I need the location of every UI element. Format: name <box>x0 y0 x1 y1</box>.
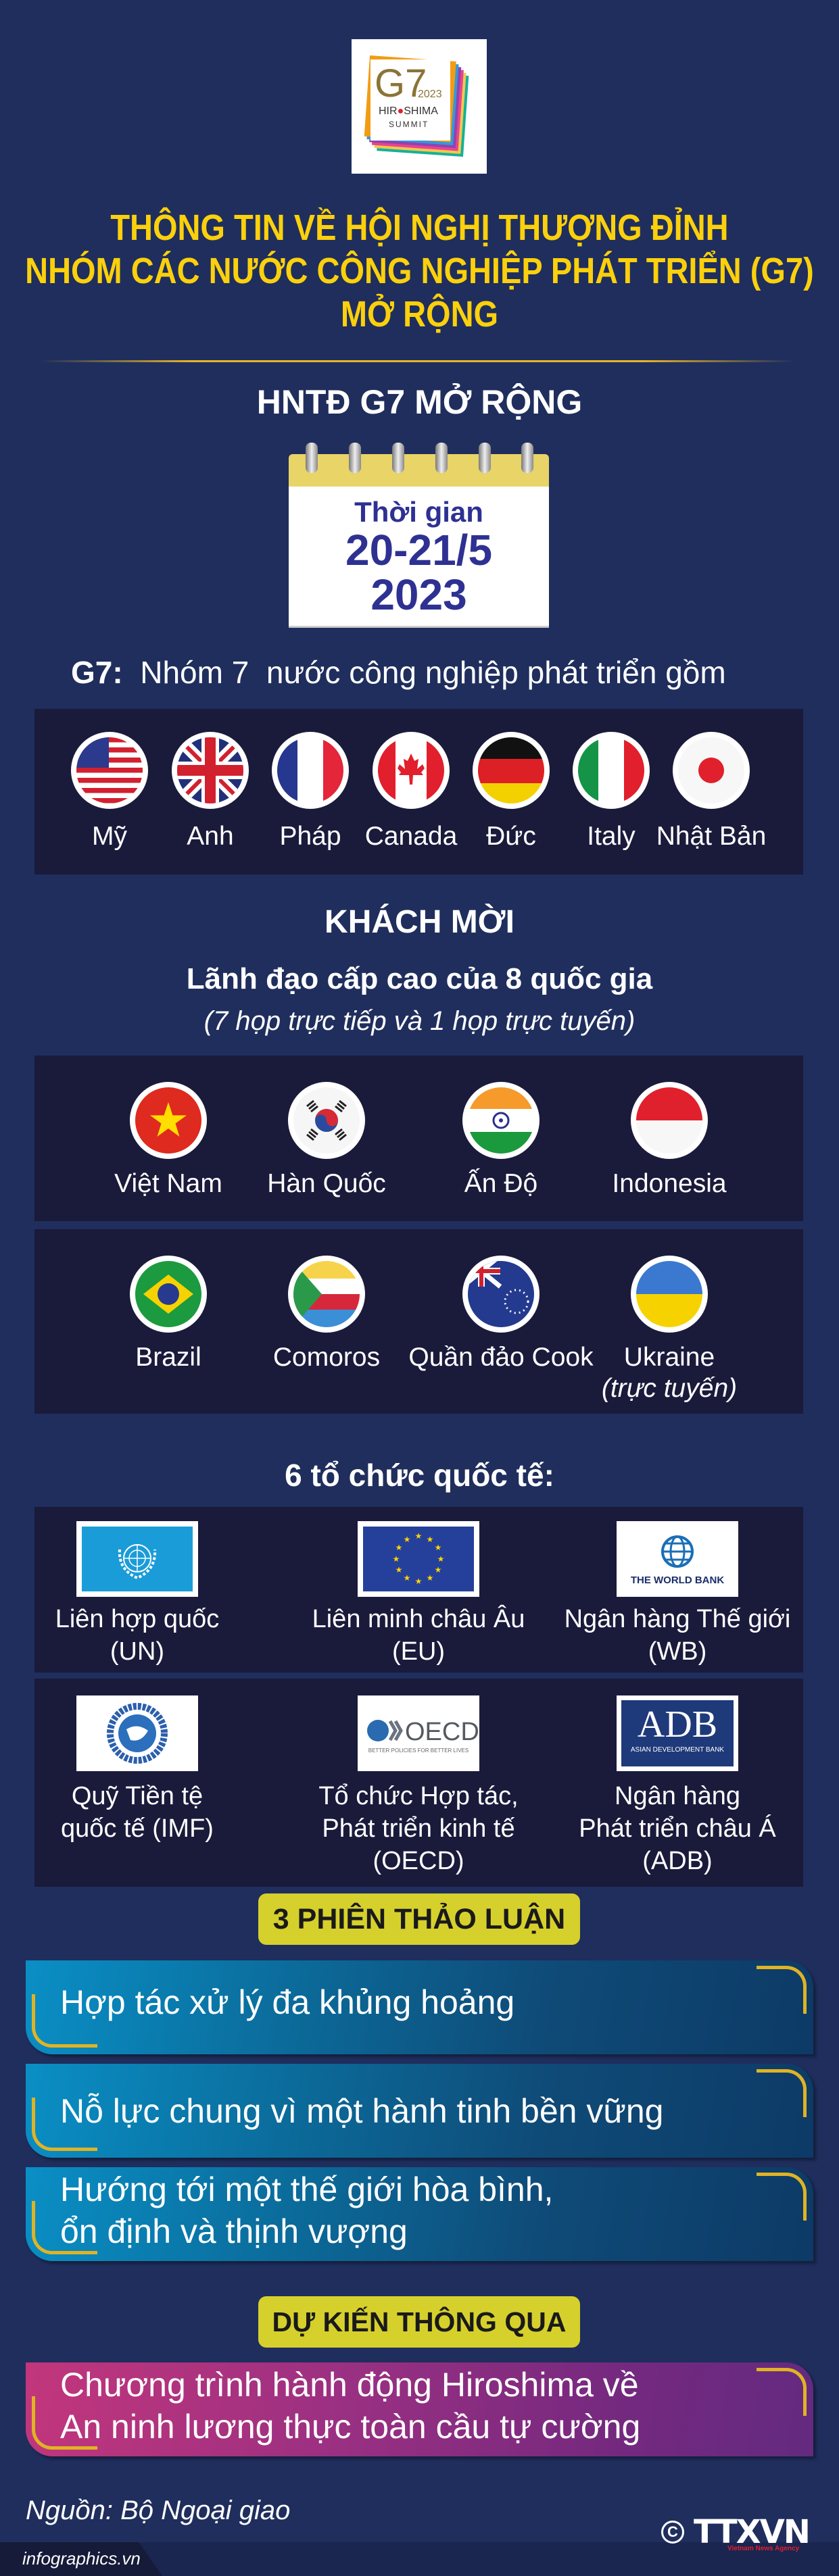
logo: EU: ★ <box>404 1535 410 1544</box>
org labels row 2: Tổ chức Hợp tác, <box>318 1782 519 1810</box>
banner: session 2 <box>26 2064 813 2158</box>
logo: IMF <box>76 1695 198 1771</box>
logo: TTXVN: C <box>667 2523 678 2540</box>
calendar: thời gian: Thời gian <box>354 496 483 528</box>
logo: EU: ★ <box>427 1573 433 1583</box>
logo: EU: ★ <box>415 1577 422 1586</box>
org labels row 2: Phát triển kinh tế <box>322 1814 515 1843</box>
tag: 3 phiên thảo luận <box>258 1893 580 1945</box>
org labels row 1 <box>55 1604 790 1666</box>
calendar: thời gian: 20-21/5 <box>345 526 492 574</box>
org labels row 1: Liên hợp quốc <box>55 1605 219 1633</box>
guest labels row 2: Brazil <box>135 1343 201 1372</box>
guest labels row 1: Hàn Quốc <box>267 1169 386 1198</box>
banner: expected adoption: An ninh lương thực toàn cầu tự cường <box>60 2408 640 2446</box>
flag labels: Mỹ <box>92 822 127 851</box>
logo: EU: ★ <box>435 1543 441 1552</box>
flag labels: Italy <box>587 822 636 851</box>
footer: infographics.vn <box>0 2542 162 2576</box>
logo: TTXVN: TTXVN <box>694 2513 809 2551</box>
panel: G7 flags <box>34 709 803 874</box>
logo: EU: ★ <box>395 1565 402 1575</box>
flag: Korea <box>288 1082 365 1159</box>
banner: session 1: Hợp tác xử lý đa khủng hoảng <box>60 1983 514 2021</box>
tag: dự kiến thông qua: DỰ KIẾN THÔNG QUA <box>272 2306 566 2337</box>
note: trực tiếp / trực tuyến: (7 họp trực tiếp và 1 họp trực tuyến) <box>204 1006 635 1036</box>
logo: OECD <box>358 1695 479 1771</box>
banner: expected adoption: Chương trình hành động Hiroshima về <box>60 2366 639 2404</box>
flag: Comoros <box>288 1256 365 1333</box>
flag: USA <box>71 732 148 809</box>
title <box>25 207 814 335</box>
heading: 6 tổ chức quốc tế: 6 tổ chức quốc tế: <box>285 1458 554 1493</box>
logo: EU: ★ <box>427 1535 433 1544</box>
logo: UN <box>76 1521 198 1597</box>
flag: Canada <box>373 732 450 809</box>
heading: HNTĐ G7 mở rộng: HNTĐ G7 MỞ RỘNG <box>257 383 582 421</box>
guest labels row 1: Ấn Độ <box>464 1169 537 1198</box>
logo: G7 Hiroshima summit: G7 <box>375 61 427 105</box>
logo: EU: ★ <box>404 1573 410 1583</box>
flag labels: Đức <box>486 822 536 851</box>
logo: G7 Hiroshima summit: HIR●SHIMA <box>379 105 438 117</box>
flag: Brazil <box>130 1256 207 1333</box>
title: NHÓM CÁC NƯỚC CÔNG NGHIỆP PHÁT TRIỂN (G7) <box>25 251 814 291</box>
logo: ADB <box>617 1695 738 1771</box>
logo: ADB: ASIAN DEVELOPMENT BANK <box>631 1746 724 1754</box>
flag: Italy <box>573 732 650 809</box>
text: G7 definition: G7: Nhóm 7 nước công nghiệp phát triển gồm <box>71 655 726 690</box>
guest labels row 1: Việt Nam <box>114 1169 222 1198</box>
panel: organisations row 1 <box>34 1507 803 1673</box>
org labels row 1: Ngân hàng Thế giới <box>565 1605 790 1633</box>
heading: khách mời: KHÁCH MỜI <box>325 904 514 940</box>
calendar: thời gian: 2023 <box>370 570 467 619</box>
org labels row 1: (WB) <box>648 1637 706 1666</box>
logo: World Bank: THE WORLD BANK <box>631 1575 724 1586</box>
flag: Germany <box>473 732 550 809</box>
flag: Cook Islands <box>462 1256 540 1333</box>
org labels row 2: quốc tế (IMF) <box>61 1814 214 1843</box>
source note: Nguồn: Bộ Ngoại giao <box>26 2496 290 2525</box>
banner: session 3: ổn định và thịnh vượng <box>60 2212 408 2250</box>
panel: guests row 2 <box>34 1229 803 1414</box>
footer: infographics.vn: infographics.vn <box>22 2548 141 2569</box>
flag: UK <box>172 732 249 809</box>
logo: EU <box>358 1521 479 1597</box>
guest labels row 1 <box>114 1168 727 1198</box>
banner: session 3: Hướng tới một thế giới hòa bình, <box>60 2171 553 2208</box>
logo: G7 Hiroshima summit <box>352 39 487 174</box>
guest labels row 2: Ukraine <box>624 1343 715 1372</box>
flag labels: Nhật Bản <box>656 822 766 851</box>
guest labels row 2: Comoros <box>273 1343 380 1372</box>
tag: 3 phiên thảo luận: 3 PHIÊN THẢO LUẬN <box>273 1903 565 1935</box>
guest labels row 1: Indonesia <box>612 1169 727 1198</box>
org labels row 2: (ADB) <box>642 1847 713 1875</box>
org labels row 2: (OECD) <box>373 1847 464 1875</box>
banner: session 1 <box>26 1960 813 2054</box>
guest labels row 2: Quần đảo Cook <box>408 1343 594 1372</box>
logo: World Bank <box>617 1521 738 1597</box>
org labels row 1: (EU) <box>392 1637 445 1666</box>
logo: TTXVN: Vietnam News Agency <box>727 2545 799 2552</box>
flag labels <box>92 822 766 851</box>
org labels row 1: Liên minh châu Âu <box>312 1605 525 1633</box>
guest labels row 2: (trực tuyến) <box>602 1374 737 1403</box>
org labels row 2: Phát triển châu Á <box>579 1814 776 1843</box>
logo: ADB: ADB <box>638 1704 717 1745</box>
flag: India <box>462 1082 540 1159</box>
org labels row 2 <box>61 1782 776 1875</box>
flag labels: Canada <box>365 822 457 851</box>
flag labels: Anh <box>187 822 234 851</box>
guest labels row 2 <box>135 1343 737 1403</box>
panel: organisations row 2 <box>34 1679 803 1887</box>
org labels row 1: (UN) <box>110 1637 164 1666</box>
title: MỞ RỘNG <box>341 294 498 335</box>
logo: EU: ★ <box>415 1531 422 1541</box>
flag labels: Pháp <box>279 822 341 851</box>
panel: guests row 1 <box>34 1056 803 1221</box>
flag: Vietnam <box>130 1082 207 1159</box>
logo: OECD: BETTER POLICIES FOR BETTER LIVES <box>368 1748 469 1754</box>
tag: dự kiến thông qua <box>258 2296 580 2348</box>
org labels row 2: Quỹ Tiền tệ <box>72 1782 203 1810</box>
org labels row 2: Ngân hàng <box>615 1782 740 1810</box>
flag: Indonesia <box>631 1082 708 1159</box>
logo: EU: ★ <box>437 1554 444 1564</box>
title: THÔNG TIN VỀ HỘI NGHỊ THƯỢNG ĐỈNH <box>110 207 729 248</box>
logo: EU: ★ <box>435 1565 441 1575</box>
logo: G7 Hiroshima summit: SUMMIT <box>389 120 429 129</box>
banner: expected adoption <box>26 2362 813 2456</box>
flag: France <box>272 732 349 809</box>
subheading: lãnh đạo 8 quốc gia: Lãnh đạo cấp cao của 8 quốc gia <box>187 962 652 995</box>
logo: OECD: OECD <box>405 1718 479 1746</box>
logo: G7 Hiroshima summit: 2023 <box>418 89 442 100</box>
banner: session 3 <box>26 2167 813 2261</box>
logo: EU: ★ <box>395 1543 402 1552</box>
banner: session 2: Nỗ lực chung vì một hành tinh bền vững <box>60 2092 663 2130</box>
flag: Ukraine <box>631 1256 708 1333</box>
footer strip <box>0 2542 839 2576</box>
flag: Japan <box>673 732 750 809</box>
logo: EU: ★ <box>393 1554 400 1564</box>
calendar: thời gian <box>289 443 549 628</box>
